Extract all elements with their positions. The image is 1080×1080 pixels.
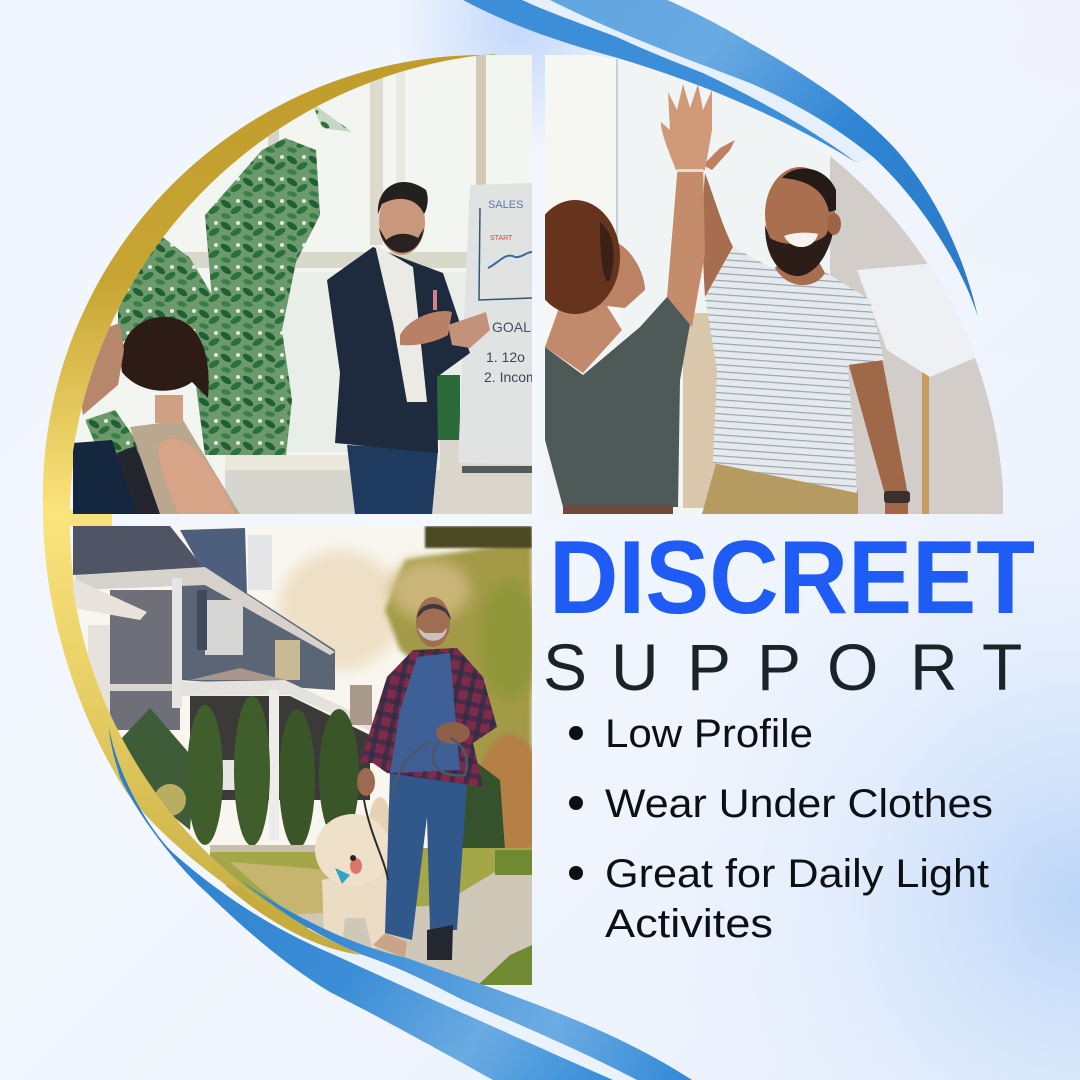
top swoosh: lower blue band: [463, 0, 857, 163]
flipchart: [458, 183, 532, 473]
boxes: [683, 313, 717, 508]
bullet list: [569, 712, 993, 946]
top swoosh: main blue band: [550, 0, 978, 317]
flipchart: SALES: [488, 199, 523, 211]
seated woman: [117, 317, 240, 514]
trees: [272, 526, 532, 848]
gold crescent: [43, 54, 495, 953]
bushes: [122, 696, 505, 848]
bottom swoosh: main blue band: [109, 727, 613, 1080]
bullet: great for daily light activites: Great for Daily Light: [605, 852, 989, 896]
bottom swoosh: white stripe: [310, 935, 637, 1080]
flipchart: START: [490, 235, 513, 242]
heading: DISCREET: DISCREET: [549, 520, 1035, 636]
lamp: [857, 263, 977, 514]
heading: SUPPORT: SUPPORT: [543, 630, 1022, 704]
seated person left: [73, 323, 137, 514]
flipchart: GOALS: [492, 319, 540, 335]
bullet: great for daily light activites: [569, 852, 989, 946]
ground: [210, 845, 532, 985]
photo: presenter at flipchart: [73, 55, 540, 514]
table: [225, 455, 440, 470]
wood wall: [830, 140, 1005, 514]
gold tip: [225, 885, 362, 955]
top swoosh: white stripe: [522, 0, 873, 163]
house: [73, 526, 375, 840]
photo: high five: [530, 55, 1005, 514]
bullet: low profile: Low Profile: [605, 712, 813, 756]
flipchart: 1. 12o: [486, 349, 525, 365]
photo: man walking dog: [73, 526, 544, 985]
bullet: great for daily light activites: Activites: [605, 902, 773, 946]
plant: [85, 103, 460, 460]
man: [702, 140, 910, 514]
walking man: [357, 597, 497, 960]
woman: [530, 84, 712, 514]
bottom swoosh: thin blue band: [240, 880, 692, 1080]
flipchart: 2. Incom: [484, 369, 538, 385]
bullet: wear under clothes: Wear Under Clothes: [605, 782, 993, 826]
presenter: [327, 182, 490, 514]
dog: [315, 797, 392, 948]
